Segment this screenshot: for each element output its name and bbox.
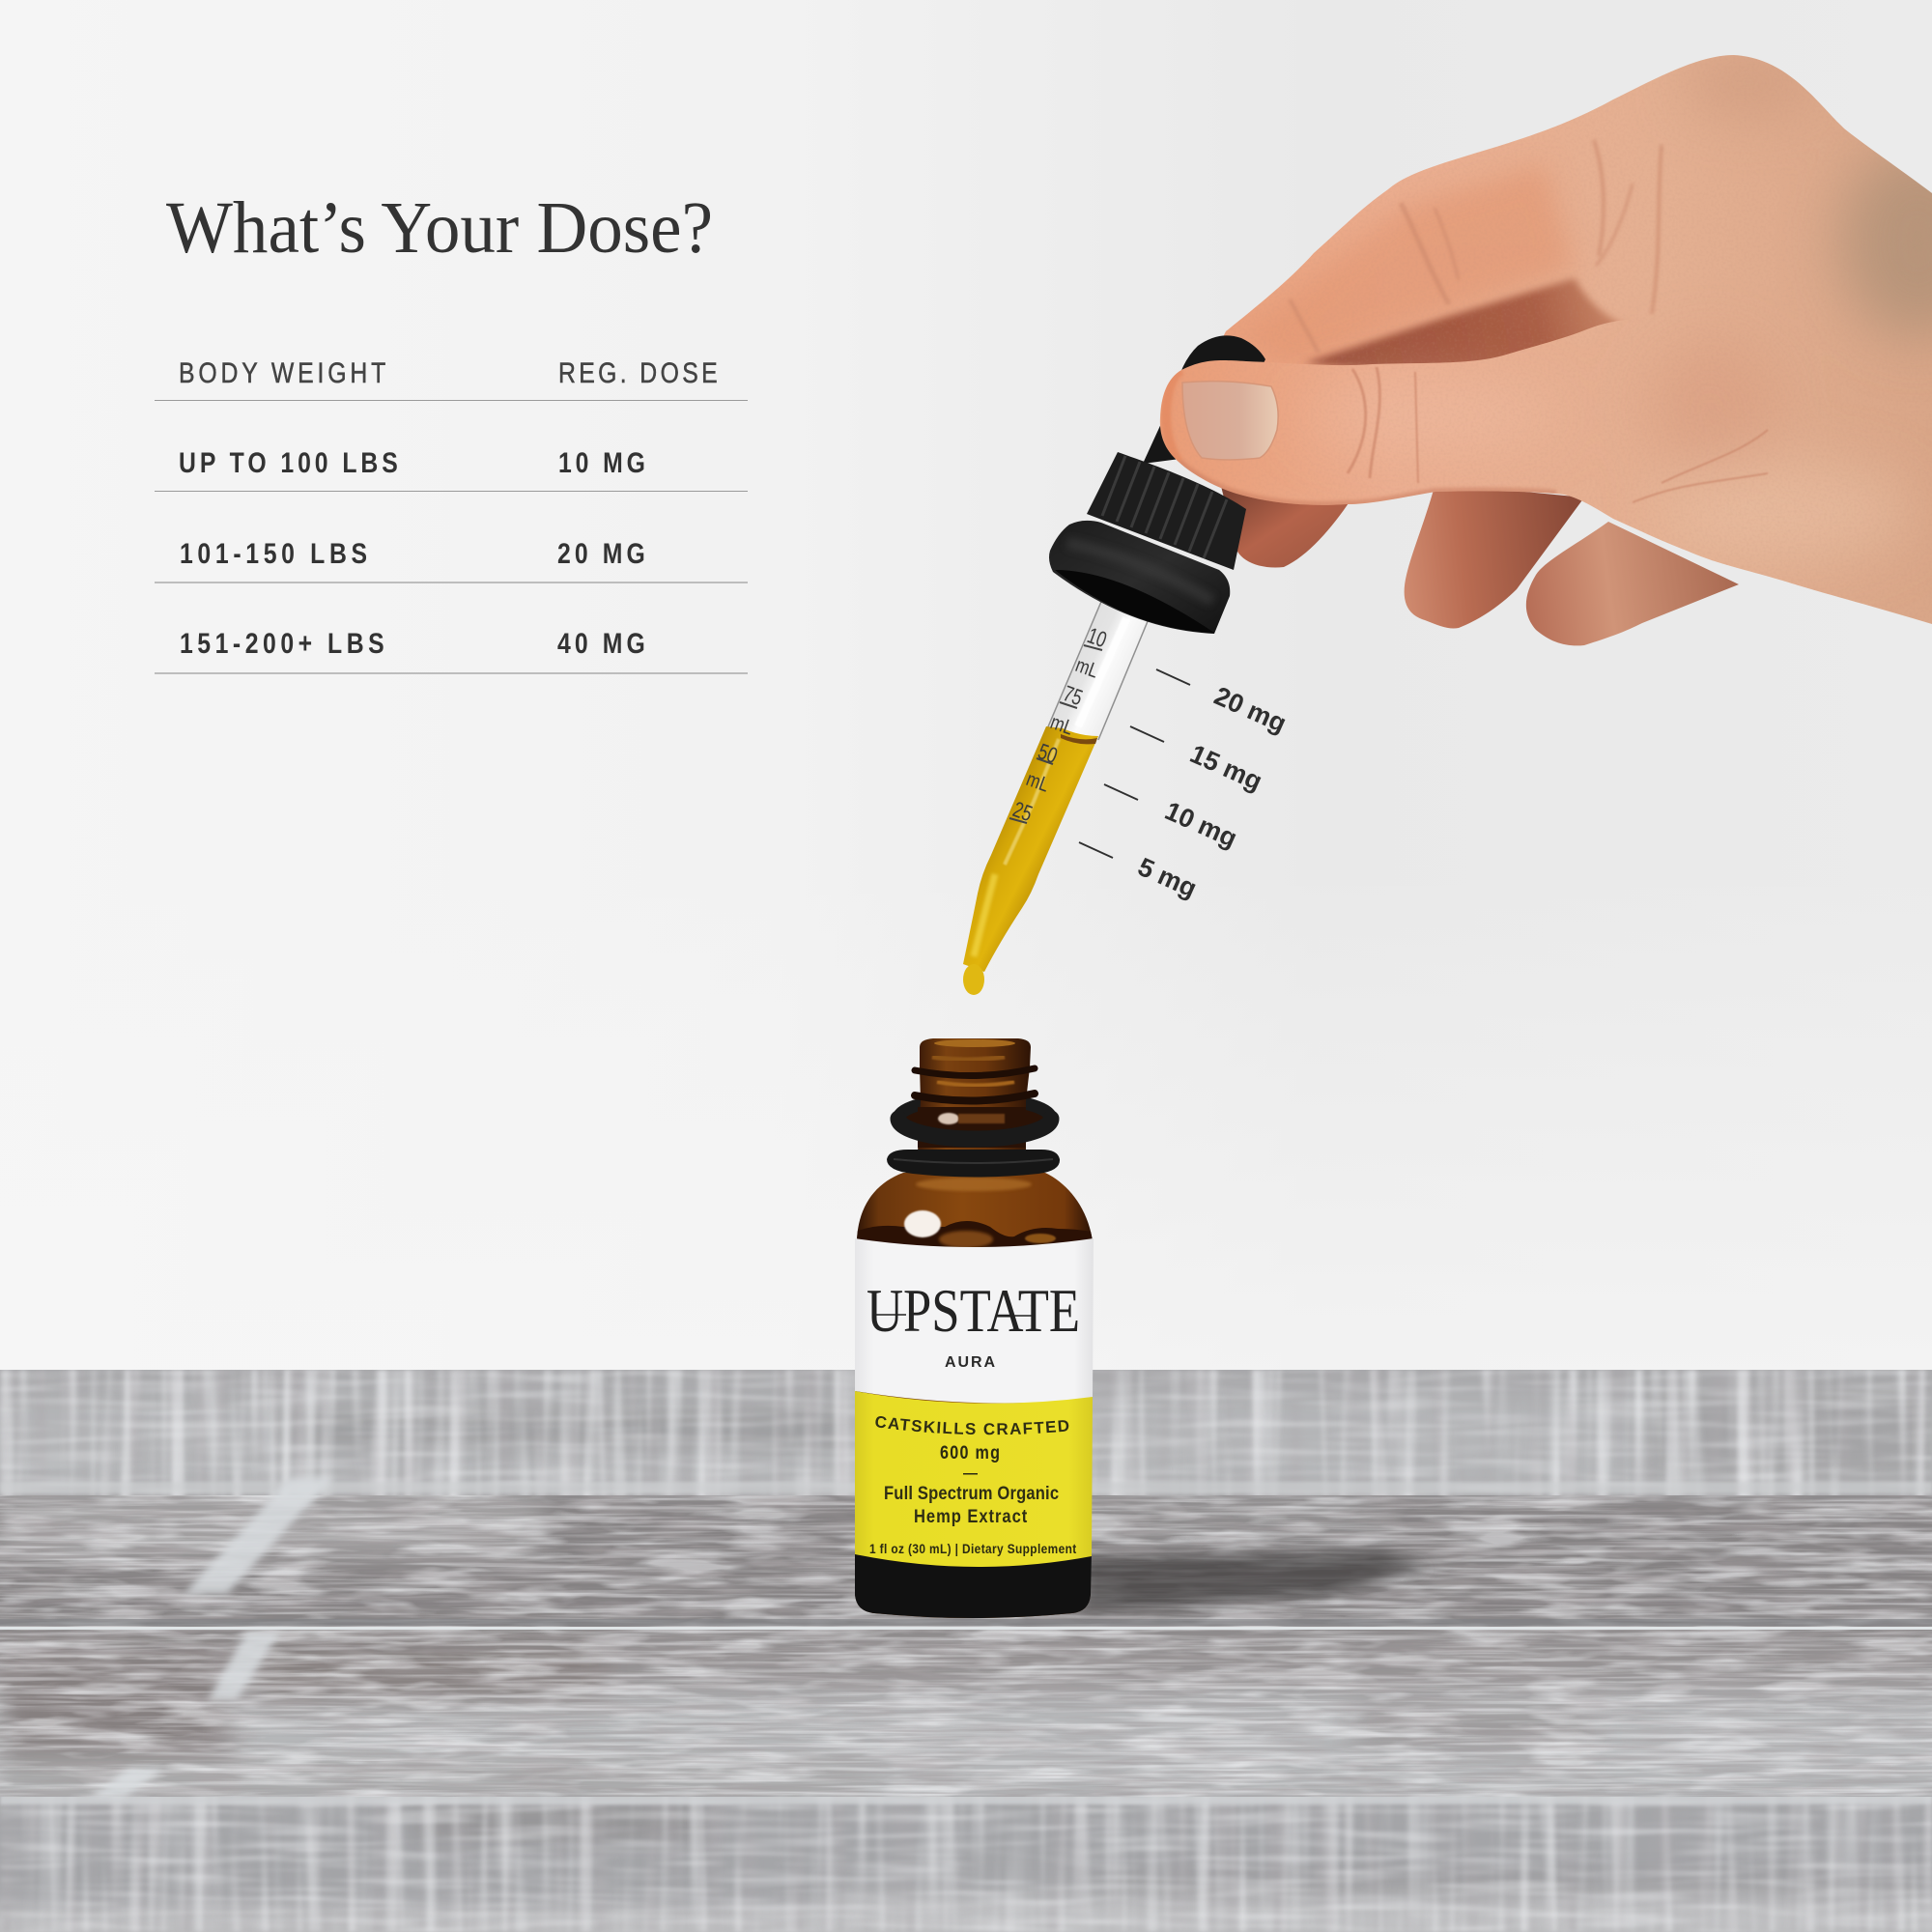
knuckle folds: [1290, 140, 1662, 353]
yellow label: [855, 1391, 1093, 1567]
oil in bottle: [857, 1177, 1092, 1247]
cap knurled body: [1087, 452, 1246, 570]
hand shading and texture: [1161, 340, 1903, 554]
label: product name: Hemp Extract: [914, 1506, 1027, 1526]
glass tube: [1046, 597, 1151, 740]
label: Catskills Crafted: CATSKILLS CRAFTED: [875, 1416, 1068, 1435]
graduation marks on tube: 25: [1009, 798, 1036, 827]
white scratches on table: [92, 1478, 333, 1797]
cap skirt: [1049, 521, 1230, 634]
rubber bulb: [1143, 335, 1265, 464]
graduation marks on tube: 75: [1060, 682, 1086, 711]
row: 151-200+ lbs: 151-200+ LBS: [180, 627, 384, 659]
label: product name: [884, 1483, 1059, 1526]
tick: 15 mg: [1130, 726, 1266, 796]
hand: index finger and back of hand: [1223, 55, 1932, 367]
tick: 5 mg: 5 mg: [1134, 852, 1201, 903]
label: volume and supplement note: 1 fl oz (30 mL) | Dietary Supplement: [869, 1541, 1077, 1556]
hand: thumb and palm: [1159, 48, 1932, 628]
tick: 10 mg: 10 mg: [1161, 796, 1241, 853]
tick: 20 mg: [1156, 669, 1291, 738]
oil column: [963, 726, 1098, 972]
bottle neck: [915, 1038, 1035, 1151]
graduation marks on tube: mL: [1023, 768, 1052, 797]
row: 151-200+ lbs: [180, 627, 645, 659]
table header: [179, 356, 718, 388]
label: 600 mg: 600 mg: [940, 1442, 1000, 1463]
bottle glass body: [855, 1173, 1093, 1618]
thumb nail: [1182, 382, 1278, 460]
middle finger: [1219, 478, 1352, 567]
background wall: [0, 0, 1932, 1381]
ring finger: [1405, 483, 1584, 629]
row: 101-150 lbs: 101-150 LBS: [180, 537, 367, 569]
tick: 10 mg: [1104, 784, 1241, 853]
title: What’s Your Dose?: [166, 187, 713, 269]
tick: 20 mg: 20 mg: [1210, 681, 1291, 738]
oil meniscus: [1061, 734, 1097, 744]
dose scale: [1079, 669, 1291, 903]
index finger shading: [1260, 166, 1573, 363]
brand: AURA: AURA: [945, 1354, 995, 1371]
row: 101-150 lbs: 20 MG: [557, 537, 645, 569]
row: up to 100 lbs: UP TO 100 LBS: [179, 446, 398, 478]
upper tamper ring: [898, 1119, 1051, 1139]
lower tamper ring: [887, 1150, 1060, 1177]
bottle shadow: [1082, 1550, 1430, 1611]
little finger: [1526, 522, 1739, 645]
graduation marks on tube: mL: [1072, 654, 1101, 683]
white label: [855, 1238, 1094, 1403]
brand: UPSTATE: UPSTATE: [867, 1276, 1080, 1345]
table header: REG. DOSE: [558, 356, 718, 388]
tick: 5 mg: [1079, 842, 1201, 903]
row: up to 100 lbs: [179, 446, 645, 478]
graduation marks on tube: mL: [1047, 711, 1076, 740]
bottle base: [855, 1550, 1092, 1618]
row: up to 100 lbs: 10 MG: [558, 446, 645, 478]
hanging drop: [963, 964, 984, 995]
row: 151-200+ lbs: 40 MG: [557, 627, 645, 659]
dosage table: [155, 356, 748, 674]
table header: BODY WEIGHT: [179, 356, 386, 388]
glass highlight: [904, 1210, 941, 1237]
hand: fingers behind the dropper: [1219, 478, 1739, 645]
bottle: [855, 1038, 1094, 1618]
tick: 15 mg: 15 mg: [1186, 739, 1266, 796]
wooden table surface: [0, 1357, 1932, 1932]
label: product name: Full Spectrum Organic: [884, 1483, 1059, 1503]
graduation marks on tube: 10: [1084, 624, 1110, 653]
dropper: [963, 335, 1265, 995]
graduation marks on tube: 50: [1035, 740, 1061, 769]
back of upper ring: [898, 1098, 1051, 1139]
gap shadow between index finger and thumb: [1304, 278, 1633, 373]
row: 101-150 lbs: [180, 537, 645, 569]
graduation marks on tube: [1009, 624, 1110, 827]
